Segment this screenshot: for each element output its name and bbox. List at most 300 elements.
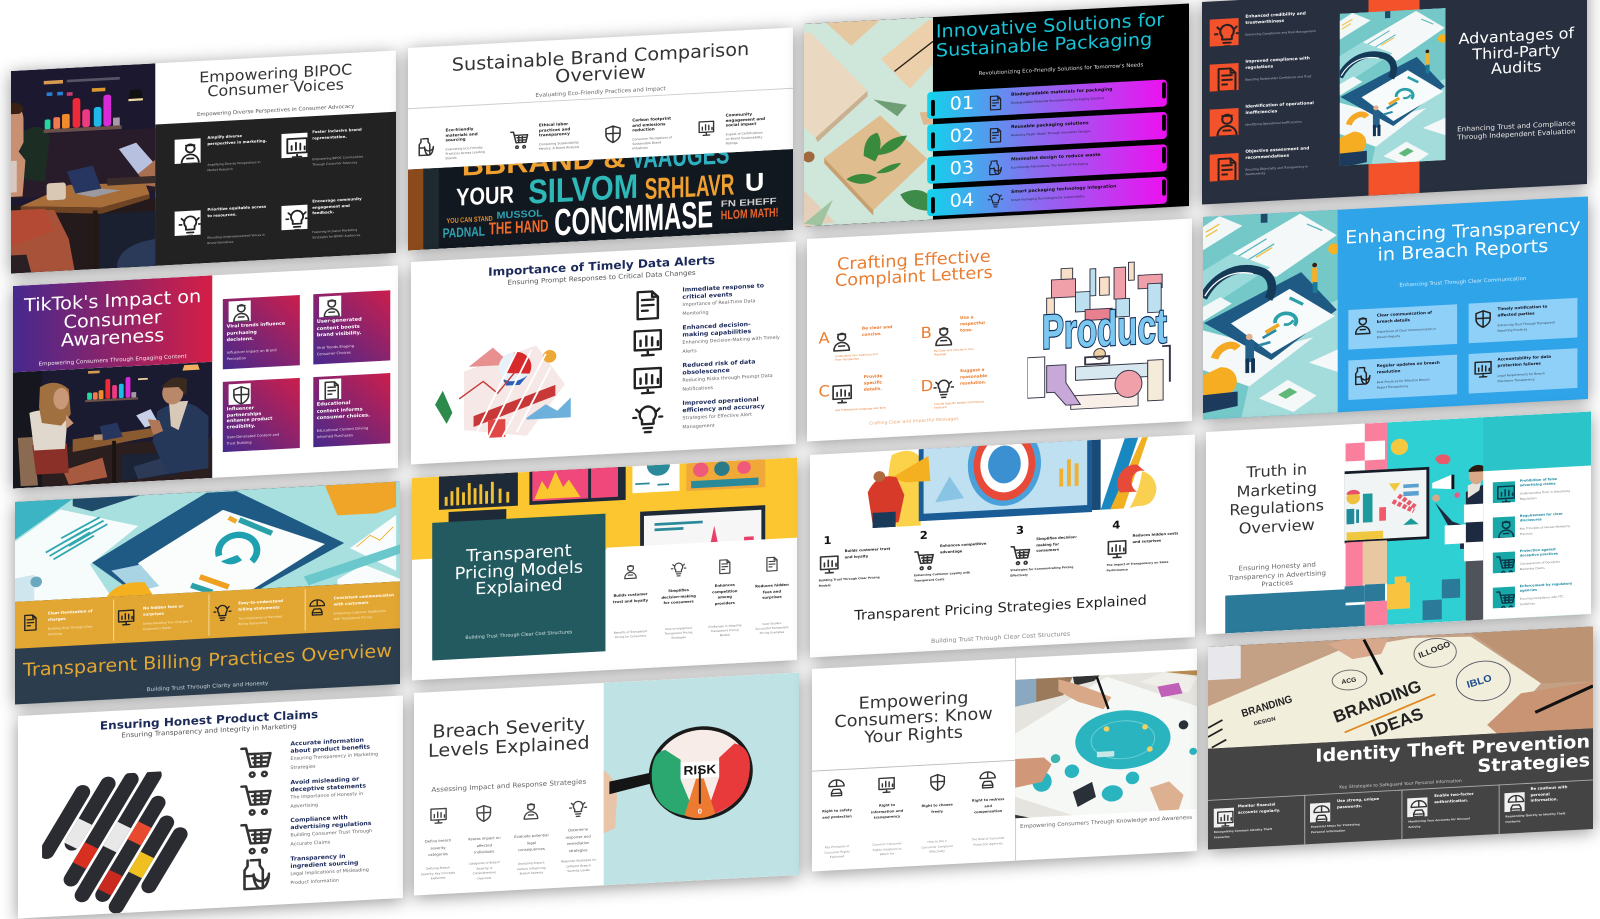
slide: Ensuring Honest Product Claims	[18, 696, 403, 918]
black slots	[931, 197, 935, 213]
point 3: consumers	[1036, 547, 1059, 553]
point 4: surprises	[762, 595, 782, 600]
subtitle: Assessing Impact and Response Strategies	[432, 778, 587, 794]
title	[1206, 458, 1348, 539]
icon: notebook	[630, 326, 665, 360]
point 1: advertising claims	[1520, 482, 1556, 487]
point 2 detail: Categories of Breach	[469, 861, 500, 866]
point 1: Immediate response to	[682, 282, 764, 294]
point 4: and surprises	[1132, 538, 1161, 544]
point 4: personal	[1531, 792, 1550, 797]
point 3 detail: Identifying Operational Inefficiencies	[1245, 120, 1301, 127]
header panel	[13, 275, 212, 372]
point 4	[290, 853, 358, 870]
label: purchasing	[226, 329, 257, 336]
icon: food jar	[418, 138, 434, 156]
point 1 detail: Strategies	[290, 764, 315, 770]
point 2: practices and	[539, 127, 570, 134]
point 1: and protection	[822, 814, 852, 820]
point 1	[416, 837, 460, 859]
number: 02	[950, 124, 974, 147]
point B detail: Be Clear and Concise in Your	[934, 347, 974, 353]
point 2 detail: Watch For	[880, 852, 895, 856]
point 1: Prohibition of false	[1520, 477, 1557, 483]
point 3 detail: Marketing Claims	[1520, 566, 1545, 571]
point 1	[1520, 477, 1557, 488]
label: Viral trends influence	[226, 321, 285, 330]
point 1: categories	[429, 852, 448, 857]
point 4 detail: Responding Quickly to Identity Theft	[1506, 812, 1566, 819]
point 2	[538, 122, 570, 139]
title: Consumer	[63, 306, 161, 332]
number 1: 1	[823, 534, 831, 547]
point 4 detail: Response Strategies for	[561, 858, 597, 864]
point 1 detail	[446, 146, 485, 161]
point 4	[750, 582, 794, 602]
point 1: Eco-friendly	[446, 128, 473, 134]
label: breach details	[1377, 318, 1410, 325]
point 1 detail: Invoicing	[48, 631, 62, 635]
card 3	[223, 378, 300, 452]
point 3	[703, 582, 747, 608]
slide: Innovative Solutions for Sustainable Packaging	[804, 4, 1189, 226]
black slots	[931, 165, 935, 181]
point 3: inefficiencies	[1245, 109, 1277, 115]
point B: respectful	[960, 322, 985, 327]
bar 04	[927, 177, 1167, 216]
point 2: representation.	[312, 133, 347, 140]
point 2 detail: Transparent Pricing	[665, 631, 693, 636]
point 4 detail: Product Information	[290, 878, 339, 886]
point 1 detail: Scenarios	[1214, 835, 1230, 839]
point 3: advertising regulations	[290, 819, 371, 831]
card 3	[1348, 355, 1457, 400]
point D: Suggest a	[960, 368, 984, 374]
point 2: individuals	[474, 849, 495, 855]
point 4: with customers	[334, 599, 369, 606]
panel: right hand image bottom area	[607, 538, 797, 670]
point 1 detail: Building Trust Through Clear Pricing	[818, 575, 879, 582]
title: Complaint Letters	[835, 264, 993, 291]
point 4 detail: The Role of Consumer	[972, 836, 1005, 842]
point 2: deceptive statements	[290, 782, 366, 793]
point 2	[1337, 797, 1380, 811]
point 2	[312, 127, 362, 140]
point C detail: Use Professional Language and Tone	[835, 406, 886, 412]
icon: cart 2	[238, 781, 275, 817]
point 3	[1520, 547, 1558, 558]
point 2 detail: How to Implement	[665, 626, 692, 631]
point 3: obsolescence	[682, 366, 729, 376]
point 3: authentication.	[1435, 798, 1469, 804]
point 4 detail	[751, 621, 793, 637]
point 4 detail	[556, 858, 602, 875]
point 4 detail	[682, 412, 752, 432]
title: Regulations	[1230, 496, 1324, 519]
point 3 detail: Effectively	[1010, 573, 1027, 578]
detail: Report Transparency	[1377, 384, 1409, 389]
point 1: trust and loyalty	[613, 598, 648, 604]
icon 3	[716, 558, 734, 576]
point 4: Right to redress	[972, 798, 1005, 803]
point A detail	[835, 353, 878, 362]
point 4	[1245, 146, 1309, 160]
title: Explained	[475, 576, 563, 599]
point 4	[334, 592, 394, 607]
bar 02	[927, 112, 1167, 152]
point 2 detail: Personal Information	[1311, 829, 1346, 834]
point 1 detail: Market Research	[207, 166, 233, 171]
label: protection failures	[1498, 362, 1541, 369]
label: affected parties	[1498, 312, 1535, 318]
point 2: Use strong, unique	[1337, 797, 1380, 803]
title: Your Rights	[864, 723, 963, 748]
icon	[990, 128, 1002, 143]
icon: cart 3	[238, 819, 275, 855]
icon: cart 1	[238, 743, 275, 779]
letter A: A	[819, 330, 830, 348]
point 3: to resources.	[207, 211, 236, 217]
icon: gear bulb	[630, 402, 665, 436]
black slots	[931, 132, 935, 149]
point 2: surprises	[143, 610, 164, 616]
point 2 detail: Common Consumer	[872, 842, 902, 847]
icon tile 3	[1209, 108, 1238, 137]
label: Smart packaging technology integration	[1011, 185, 1116, 195]
point 4 detail: with Transparent Pricing	[334, 615, 372, 620]
point 2: making capabilities	[682, 327, 751, 338]
point 3: freely	[931, 809, 943, 814]
title	[199, 61, 352, 100]
point 4 detail	[1245, 165, 1308, 176]
illustration: diagonal bands	[42, 769, 206, 917]
point 3: Identification of operational	[1245, 101, 1314, 109]
image: typographic wall: SRHLAVR	[645, 168, 734, 206]
point 1: critical events	[682, 291, 732, 300]
icon 4	[1105, 538, 1128, 561]
point 4 detail: Case Studies:	[762, 622, 782, 626]
point 3 detail: Sustainable Brand	[632, 141, 661, 146]
icon	[318, 378, 341, 400]
point 1: Accurate information	[290, 736, 364, 747]
tile 1	[1493, 481, 1515, 503]
title: Crafting Effective	[837, 248, 991, 275]
image: branding sketchbook: BRANDING	[1331, 677, 1424, 727]
point B: Use a	[960, 316, 974, 321]
icon 1	[21, 612, 40, 633]
detail: Enhancing Trust Through Transparent	[1498, 321, 1555, 328]
point 2 detail: Customer's Guide	[143, 625, 172, 630]
point D detail	[934, 400, 984, 410]
letter C: C	[819, 383, 830, 402]
title: Enhancing Transparency	[1345, 214, 1581, 248]
detail: Importance of Clear Communication in	[1377, 327, 1436, 334]
title	[812, 687, 1015, 749]
point 1 detail: Explained	[830, 855, 845, 859]
label: Clear communication of	[1377, 311, 1432, 319]
point A: concise.	[862, 333, 882, 338]
subtitle: Transparency in Advertising	[1229, 568, 1326, 582]
point 3: among	[718, 594, 732, 600]
icon 3	[213, 602, 233, 623]
slide: Enhancing Transparency in Breach Reports	[1203, 197, 1588, 420]
point 3: legal	[527, 840, 536, 845]
point 4	[1520, 582, 1573, 593]
point 3	[915, 802, 959, 816]
point 1: perspectives in marketing.	[207, 138, 267, 145]
point 3 detail: Elevating Underrepresented Voices in	[207, 233, 265, 239]
label: partnerships	[226, 411, 261, 418]
image: branding sketchbook: DESIGN	[1254, 717, 1277, 728]
image: typographic wall: U	[745, 167, 764, 197]
point 4: remediation	[567, 841, 590, 846]
point 1: accounts regularly.	[1238, 808, 1281, 814]
icon tile 4	[1209, 153, 1238, 182]
point 3 detail: Consumer Complaint	[922, 844, 953, 849]
point 2: advantage	[940, 548, 962, 554]
point 2 detail: Strategies	[671, 636, 686, 640]
point 2 detail	[312, 155, 363, 166]
icon: store	[281, 132, 307, 158]
illustration: marketing target	[810, 434, 1195, 532]
icon 1	[622, 563, 639, 581]
tile 4	[1493, 587, 1515, 608]
card 1	[1348, 305, 1457, 350]
point 3 detail: Consumer Perceptions of	[632, 136, 672, 142]
point 1	[1245, 11, 1306, 25]
point 4 detail: Performance	[1106, 568, 1128, 572]
detail: Influencer Impact on Brand	[226, 348, 276, 355]
point 3: and emissions	[632, 122, 666, 129]
point 3: making for	[1036, 541, 1059, 547]
icon	[318, 296, 341, 317]
icon 3	[1009, 543, 1032, 566]
slide: Breach Severity Levels Explained	[414, 673, 799, 896]
point 1: charges	[48, 616, 66, 621]
label: Accountability for data	[1498, 355, 1551, 363]
title: Awareness	[61, 324, 164, 351]
point 4	[682, 396, 764, 414]
point 4: Determine	[568, 827, 588, 833]
image: branding sketchbook: IDEAS	[1369, 704, 1426, 741]
point 3	[290, 813, 371, 831]
image: branding sketchbook: BRANDING	[1241, 694, 1294, 720]
label: Minimalist design to reduce waste	[1011, 153, 1101, 162]
point 2	[682, 322, 751, 339]
image: branding sketchbook: IBLO	[1466, 674, 1494, 691]
detail: Reporting Practices	[1498, 327, 1527, 333]
point 4: fees and	[763, 589, 781, 594]
panel: title block	[432, 514, 606, 661]
point 1: Right to safety	[822, 808, 852, 814]
point 3: Prioritize equitable access	[207, 204, 266, 211]
point 3 detail: Activity	[1409, 825, 1421, 829]
image: typographic wall	[408, 149, 793, 250]
divider	[408, 88, 793, 109]
point 4: social impact	[726, 122, 756, 129]
point 2: for consumers	[664, 599, 694, 605]
point 2	[290, 776, 366, 793]
title	[1338, 216, 1588, 266]
title: Marketing	[1237, 478, 1317, 500]
detail: Informed Purchases	[317, 433, 353, 439]
point 3 detail: Building Consumer Trust Through	[290, 829, 372, 838]
detail: User-Generated Content and	[226, 432, 279, 439]
point 4	[312, 196, 362, 215]
icon	[1473, 359, 1494, 380]
point 2 detail: Boosting Stakeholder Confidence and Trust	[1245, 74, 1311, 82]
icon: community	[698, 120, 714, 136]
point 4 detail: Protection Agencies	[974, 841, 1003, 847]
point 3 detail: Challenges in Adopting	[708, 624, 742, 629]
point 3 detail	[1010, 564, 1073, 578]
image: cafe scene with neon chart	[11, 64, 156, 274]
point 3 detail	[290, 828, 372, 849]
point 4	[1531, 785, 1568, 804]
icon 4	[568, 797, 589, 820]
icon 2	[670, 561, 687, 578]
title: Advantages of	[1458, 24, 1574, 48]
point 1 detail: Severity: Key Concepts	[421, 871, 455, 876]
title: Transparent	[466, 542, 572, 566]
icon	[989, 160, 1002, 176]
point 1 detail: Recognizing Common Identity Theft	[1214, 827, 1273, 834]
label: resolution	[1377, 369, 1401, 375]
detail: Eco-Friendly Alternatives: The Future of Packaging	[1011, 162, 1088, 170]
point 3 detail: How to File a	[928, 839, 947, 844]
bar 03	[927, 144, 1167, 184]
point 2 detail: The Importance of Honesty in	[290, 791, 363, 800]
point 1	[290, 737, 370, 755]
divider 3	[1498, 785, 1501, 834]
point 3 detail: Notifications	[682, 385, 713, 392]
point 3: Evaluate potential	[515, 833, 549, 839]
subtitle: Practices	[1262, 579, 1293, 588]
point 4: information.	[1531, 797, 1558, 803]
point 4: Objective assessment and	[1245, 147, 1309, 154]
title: Identity Theft Prevention	[1316, 730, 1591, 767]
slide: Empowering BIPOC Consumer Voices	[11, 50, 396, 273]
point 2 detail: Overview	[478, 876, 492, 880]
icon	[990, 96, 1002, 110]
point 4: engagement and	[312, 202, 350, 209]
point 4: Enforcement by regulatory	[1520, 582, 1573, 588]
point 1 detail: Amplifying Diverse Perspectives in	[207, 160, 260, 166]
image: branding sketchbook: ACG	[1341, 677, 1357, 686]
title: Pricing Models	[455, 558, 583, 584]
label	[1498, 305, 1548, 320]
point 2	[940, 541, 986, 555]
point 4 detail	[1506, 812, 1566, 825]
point 1	[609, 591, 653, 606]
point 4	[556, 826, 601, 855]
point 3	[207, 204, 266, 218]
point 4: efficiency and accuracy	[682, 402, 764, 414]
detail: Reducing Plastic Waste Through Innovative Designs	[1011, 129, 1090, 137]
point C	[864, 374, 882, 394]
point 3 detail	[704, 623, 746, 639]
point 2 detail	[658, 626, 700, 642]
point D: resolution.	[960, 381, 987, 387]
card 2	[1469, 298, 1578, 344]
point 2: affected	[477, 843, 492, 848]
icon A	[830, 330, 853, 353]
point 1 detail	[290, 751, 378, 773]
point 1 detail: Key Principles of	[825, 845, 849, 850]
slide: Advantages of Third-Party Audits	[1202, 0, 1587, 204]
subtitle: Through Independent Evaluation	[1457, 127, 1575, 141]
point 3 detail: Effectively	[930, 849, 945, 854]
tile 2	[1310, 803, 1331, 823]
icon C	[830, 383, 854, 406]
image: marketer with charts	[1206, 412, 1591, 634]
image: typographic wall: YOU CAN STAND	[447, 214, 493, 225]
title: Strategies	[1478, 749, 1591, 777]
label	[317, 399, 370, 422]
black slots	[931, 100, 935, 116]
title: Levels Explained	[428, 732, 590, 762]
icon: globe coin	[605, 125, 621, 144]
point 2: regulations	[1245, 64, 1273, 70]
label	[1377, 361, 1440, 376]
point 3: deceptive practices	[1520, 552, 1558, 557]
point 2	[865, 802, 909, 822]
point 1 detail: Benefits of Transparent	[614, 630, 647, 635]
point 2 detail: Understanding Your Charges: A	[143, 619, 193, 625]
point 4: strategies	[569, 847, 588, 853]
point 2: decision-making	[662, 593, 696, 600]
point 4: Reduces hidden	[755, 582, 789, 589]
point 3 detail	[632, 136, 672, 151]
point 4 detail	[334, 609, 387, 622]
point 2	[1520, 512, 1563, 523]
point 2 detail: Severity: A	[477, 866, 493, 870]
panel: dark list	[155, 111, 396, 266]
point 3 detail: Monitoring Your Accounts for Unusual	[1409, 817, 1470, 824]
point 4: engagement and	[726, 117, 765, 124]
subtitle: Key Strategies to Safeguard Your Personal Information	[1340, 780, 1462, 791]
point 3 detail: Assessing Impact:	[518, 861, 545, 866]
point 3 detail: Factors Influencing	[518, 866, 546, 871]
label	[317, 317, 362, 340]
title	[414, 714, 604, 762]
point 3 detail: Reducing Risks through Prompt Data	[682, 374, 772, 384]
point 2 detail: Enhancing Decision-Making with Timely	[682, 335, 779, 346]
point 2 detail: Empowering BIPOC Communities	[312, 155, 363, 161]
point 1 detail: Evaluating Eco-Friendly	[446, 146, 483, 152]
point 2 detail: Metrics: A Brand Analysis	[539, 145, 579, 151]
point 3 detail	[207, 233, 265, 244]
title	[807, 248, 1021, 291]
point 4: feedback.	[312, 209, 334, 215]
point B detail: Message	[934, 352, 946, 357]
title: Transparent Pricing Strategies Explained	[854, 592, 1146, 624]
point 2 detail: Practices	[1520, 532, 1533, 536]
slide: Importance of Timely Data Alerts	[411, 242, 796, 465]
tile 3	[1493, 551, 1515, 573]
point 2: Assess impact on	[468, 835, 501, 842]
image: typographic wall: MUSSOL	[497, 209, 543, 222]
title: Consumers: Know	[835, 705, 993, 732]
tile 3	[1408, 798, 1428, 818]
point 4 detail: Ratings	[726, 141, 738, 146]
point 4 detail: Impact of Certifications	[726, 131, 763, 137]
icon 4	[978, 769, 998, 791]
divider 1	[1303, 795, 1306, 845]
point 2 detail: Alerts	[682, 348, 696, 354]
point 3 detail: Breach Severity	[520, 871, 544, 876]
point 1	[207, 133, 267, 146]
